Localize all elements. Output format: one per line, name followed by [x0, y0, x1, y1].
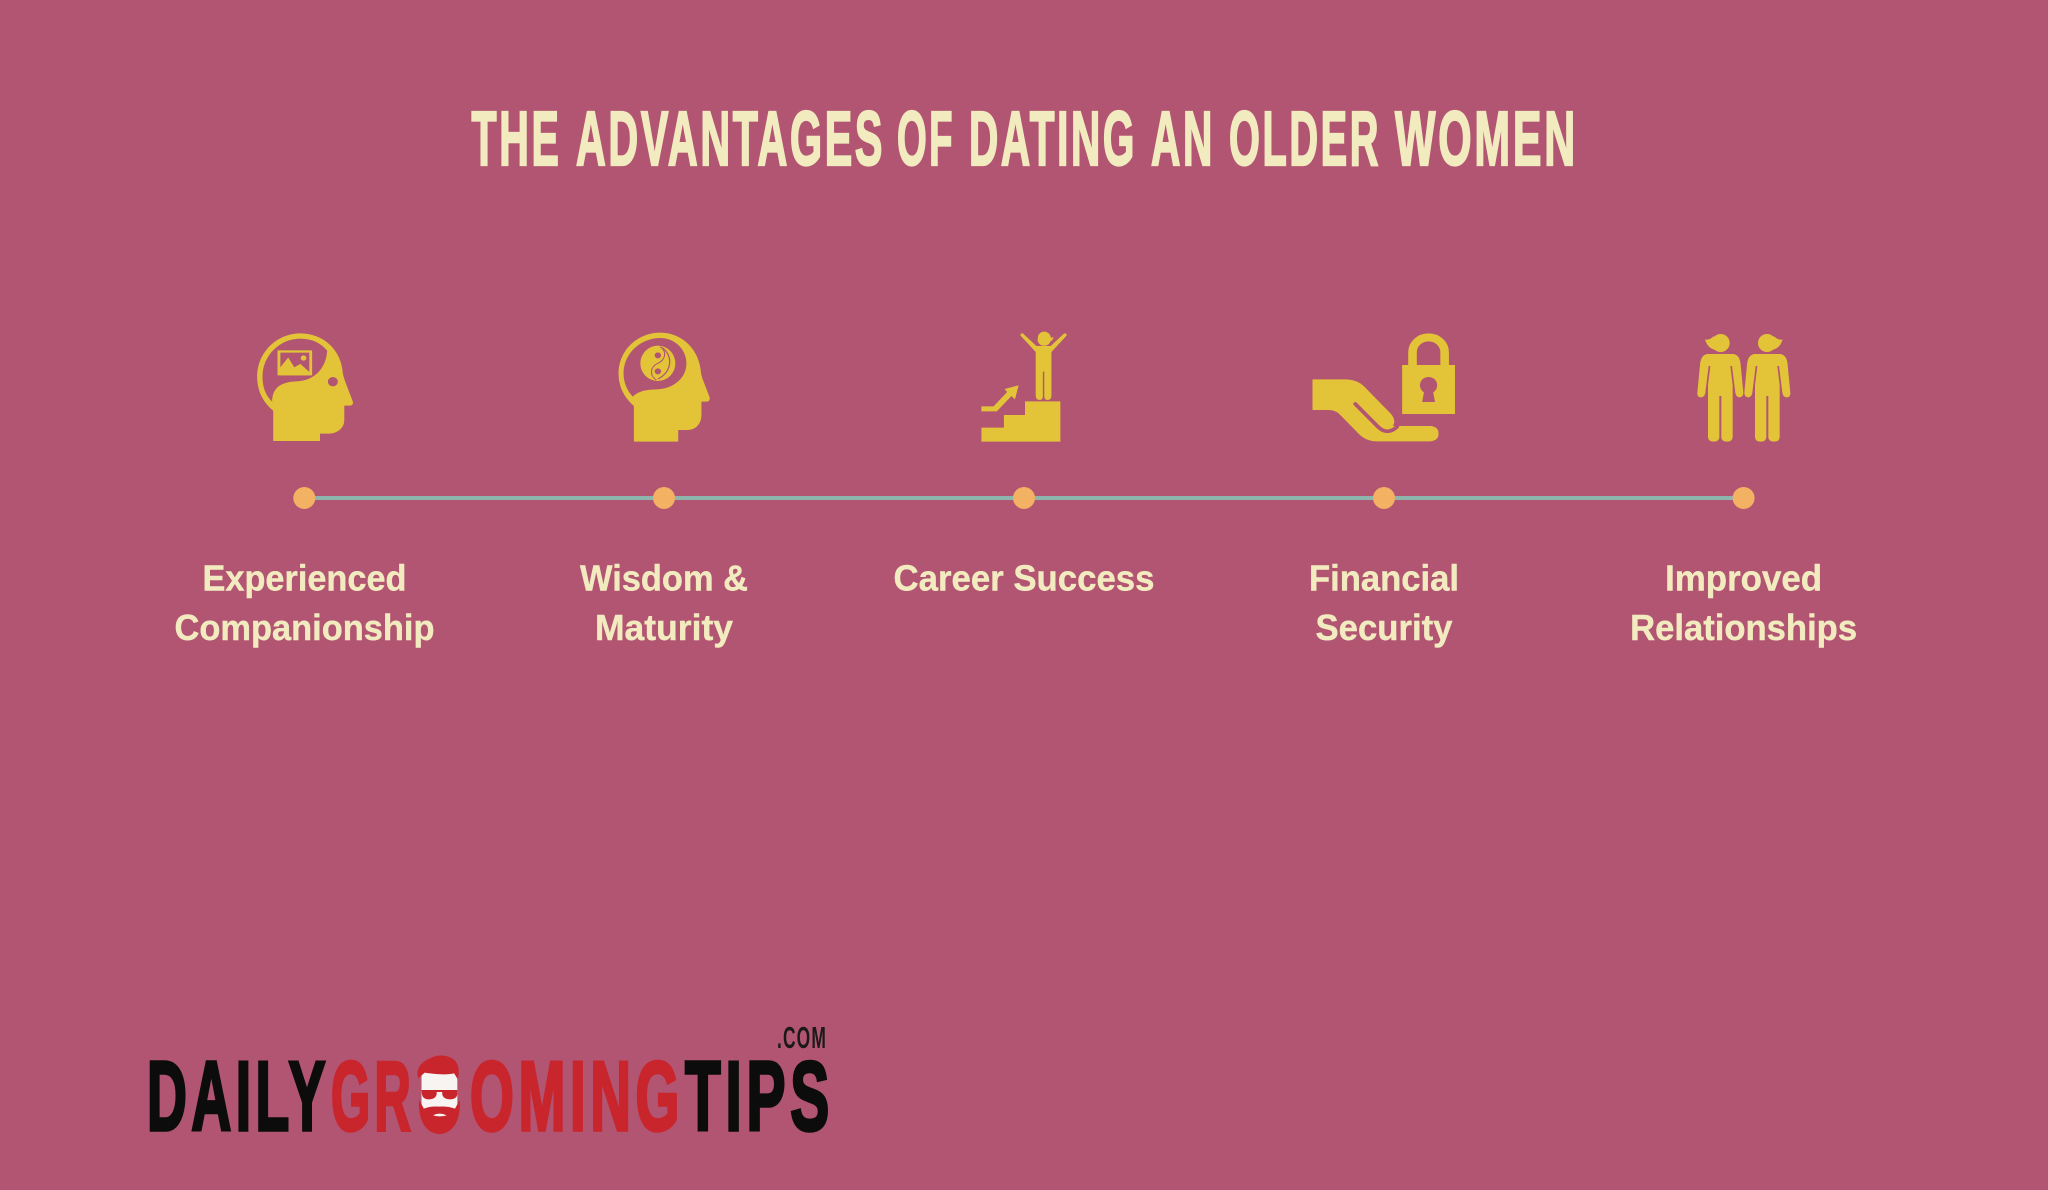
timeline: [293, 487, 1755, 509]
icon: head with yin yang: [619, 333, 710, 442]
label: financial security: Financial: [1309, 558, 1459, 598]
label: career success: Career Success: [894, 558, 1154, 598]
icon: two women standing: [1697, 334, 1790, 442]
title: DATING: [969, 96, 1137, 182]
icon: hand holding padlock: [1312, 337, 1455, 441]
label: experienced companionship: [174, 558, 434, 648]
label: wisdom and maturity: Maturity: [595, 607, 733, 648]
title: AN: [1151, 96, 1215, 182]
label: improved relationships: Relationships: [1630, 607, 1857, 648]
icon: head with picture: [257, 333, 353, 441]
label: wisdom and maturity: Wisdom &: [580, 558, 748, 598]
title: ADVANTAGES: [576, 96, 885, 182]
title: WOMEN: [1395, 96, 1578, 182]
logo: daily grooming tips: OMING: [470, 1041, 684, 1151]
title: [472, 96, 1578, 182]
label: financial security: [1309, 558, 1459, 648]
icon: bearded face: [417, 1055, 460, 1134]
logo: daily grooming tips: GR: [331, 1041, 415, 1151]
title: OLDER: [1229, 96, 1381, 182]
logo: daily grooming tips: [147, 1020, 834, 1151]
title: THE: [472, 96, 562, 182]
icon: person on stairs with arrow: [981, 332, 1067, 442]
label: experienced companionship: Experienced: [202, 558, 406, 598]
label: wisdom and maturity: [580, 558, 748, 648]
label: improved relationships: [1630, 558, 1857, 648]
logo: daily grooming tips: DAILY: [147, 1041, 330, 1151]
logo: daily grooming tips: .COM: [777, 1020, 827, 1055]
title: OF: [897, 96, 955, 182]
logo: daily grooming tips: TIPS: [685, 1041, 834, 1151]
label: experienced companionship: Companionship: [174, 607, 434, 648]
label: financial security: Security: [1316, 607, 1452, 648]
label: improved relationships: Improved: [1665, 558, 1822, 598]
